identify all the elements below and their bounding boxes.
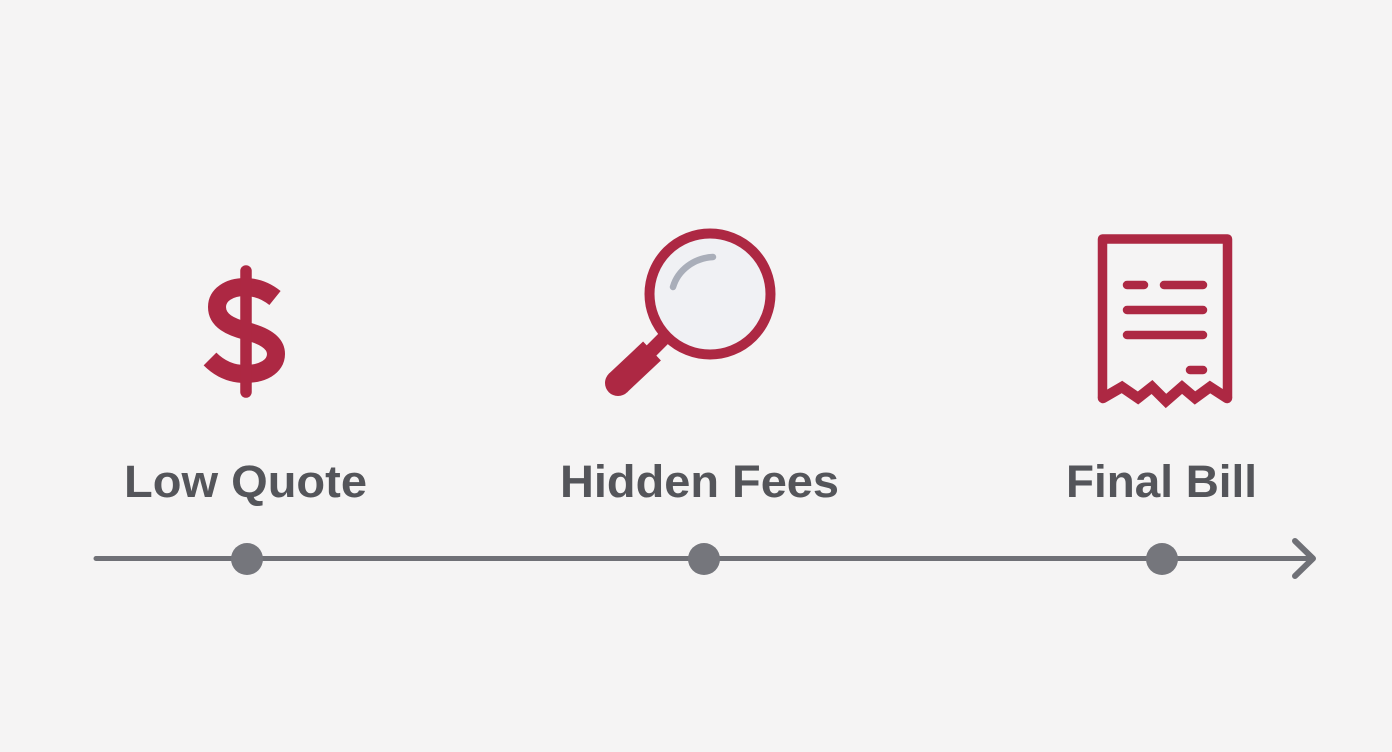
label: Hidden Fees: Hidden Fees <box>560 456 839 507</box>
timeline arrow <box>96 541 1313 576</box>
timeline marker: Final Bill <box>1146 543 1178 575</box>
label: Final Bill: Final Bill <box>1066 456 1257 507</box>
timeline marker: Low Quote <box>231 543 263 575</box>
label: Low Quote: Low Quote <box>124 456 367 507</box>
timeline marker: Hidden Fees <box>688 543 720 575</box>
icon: dollar sign <box>210 271 276 392</box>
icon: receipt <box>1102 239 1228 401</box>
icon: magnifying glass <box>605 234 770 396</box>
